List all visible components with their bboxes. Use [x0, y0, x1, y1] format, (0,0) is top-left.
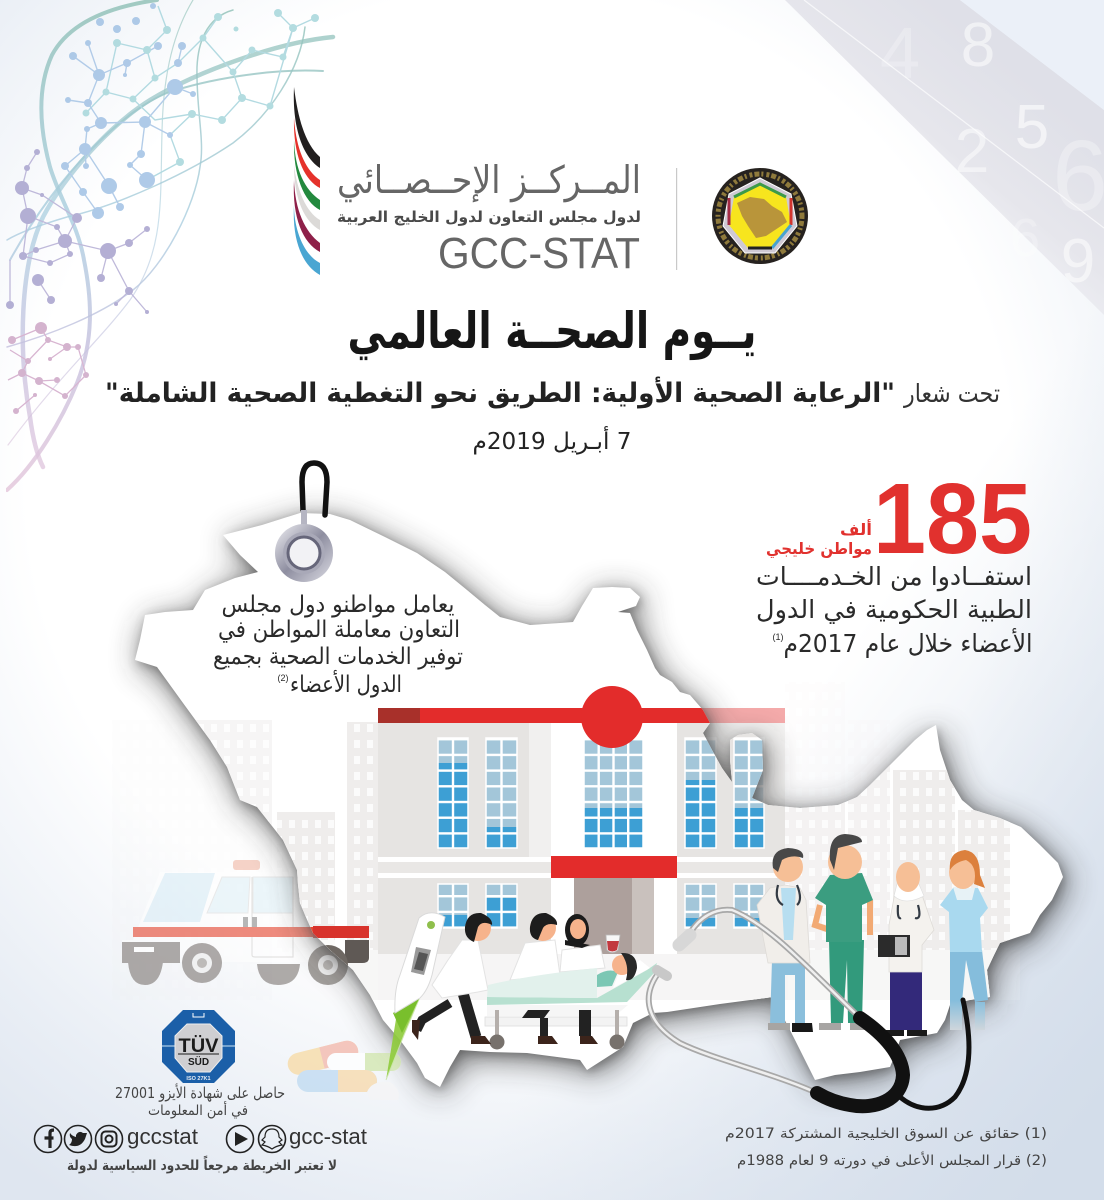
- callout: 185 thousand citizens: [756, 463, 1032, 658]
- doctor with stethoscope: [757, 848, 813, 1032]
- logo ribbons: [294, 87, 320, 275]
- background numbers band: 2: [955, 117, 989, 186]
- faded scene outside map: [112, 682, 1020, 1000]
- map callout text: [213, 592, 463, 698]
- description: الأعضاء خلال عام 2017م: [784, 627, 1032, 658]
- background numbers band: 5: [1015, 93, 1049, 162]
- person 1 pushing: [412, 913, 492, 1044]
- thin black tube: [900, 1000, 969, 1108]
- footnotes: (1) حقائق عن السوق الخليجية المشتركة 2017م: [725, 1126, 1047, 1142]
- ear tip top: [679, 935, 690, 945]
- black thick tube: [817, 1018, 903, 1106]
- subtitle: تحت شعار: [902, 379, 1000, 408]
- ISO certificate text: في أمن المعلومات: [148, 1101, 248, 1119]
- map callout text: التعاون معاملة المواطن في: [218, 617, 460, 643]
- social handle gcc-stat: gcc-stat: [289, 1124, 367, 1149]
- date: 7 أبـريل 2019م: [472, 426, 632, 455]
- map callout text: (2): [278, 673, 289, 683]
- thermometer: [386, 913, 445, 1080]
- social icons left: [34, 1126, 286, 1152]
- gulf citizen label: مواطن خليجي: [766, 539, 872, 559]
- map callout text: يعامل مواطنو دول مجلس: [222, 592, 454, 618]
- map shadow: [137, 516, 1067, 1093]
- footnotes: (2) قرار المجلس الأعلى في دورته 9 لعام 1988م: [737, 1151, 1047, 1169]
- hospital staff group: [757, 834, 988, 1036]
- TUV SUD certificate badge: TÜV: [178, 1036, 219, 1057]
- icon: instagram: [96, 1126, 122, 1152]
- logo arabic subtitle: لدول مجلس التعاون لدول الخليج العربية: [337, 208, 641, 226]
- icon: facebook: [34, 1126, 62, 1152]
- TUV SUD certificate badge: ISO 27K1: [186, 1076, 211, 1082]
- molecule network decoration: [6, 0, 333, 490]
- patient on stretcher: [412, 913, 657, 1050]
- background numbers band: 8: [961, 11, 995, 80]
- silver tube lower: [649, 975, 817, 1093]
- silver tube upper: [690, 910, 857, 1015]
- surgeon in green: [815, 834, 873, 1030]
- nurse in blue: [940, 850, 988, 1030]
- description: الطبية الحكومية في الدول: [756, 595, 1032, 625]
- background numbers band: 6: [1010, 208, 1040, 268]
- person 2: [510, 913, 598, 1044]
- TUV SUD certificate badge: SÜD: [188, 1055, 209, 1068]
- stethoscope head hanging on map: [275, 463, 333, 582]
- main title: يــوم الصحــة العالمي: [348, 302, 756, 361]
- icon: play: [226, 1126, 254, 1152]
- background numbers band: 4: [880, 14, 920, 94]
- footnotes: [725, 1126, 1047, 1169]
- logo divider: [676, 168, 677, 270]
- description: (1): [772, 632, 784, 642]
- social handle gccstat: gccstat: [127, 1124, 198, 1149]
- ISO certificate text: حاصل على شهادة الأيزو 27001: [115, 1083, 285, 1102]
- map callout text: توفير الخدمات الصحية بجميع: [213, 644, 463, 670]
- icon: twitter: [64, 1126, 92, 1152]
- logo arabic name: المــركــز الإحــصــائي: [337, 158, 641, 203]
- map disclaimer: لا تعتبر الخريطة مرجعاً للحدود السياسية لدولة: [67, 1155, 337, 1174]
- bed and patient: [487, 953, 657, 1005]
- TUV SUD certificate badge: [162, 1010, 235, 1083]
- big number: 185: [873, 463, 1032, 575]
- thousand label: ألف: [840, 519, 872, 539]
- GCC seal: [712, 168, 808, 264]
- pills: [285, 1038, 401, 1100]
- Gulf map: [135, 513, 1063, 1087]
- background numbers band: 9: [1061, 227, 1095, 296]
- stretcher frame: [485, 1005, 628, 1050]
- icon: snapchat: [258, 1126, 286, 1152]
- background numbers band: [785, 0, 1104, 315]
- logo latin name: GCC-STAT: [438, 229, 640, 278]
- nurse in hijab: [560, 914, 620, 972]
- description: [756, 562, 1032, 658]
- ear tip bottom: [657, 970, 667, 976]
- doctor in hijab: [878, 862, 934, 1036]
- GCC-STAT logo: [294, 87, 641, 278]
- large stethoscope: [649, 910, 969, 1108]
- ISO certificate text: [115, 1083, 285, 1119]
- map callout text: الدول الأعضاء: [290, 670, 402, 698]
- description: استفــادوا من الخـدمــــات: [756, 562, 1032, 592]
- subtitle: "الرعاية الصحية الأولية: الطريق نحو التغطية الصحية الشاملة": [105, 376, 895, 409]
